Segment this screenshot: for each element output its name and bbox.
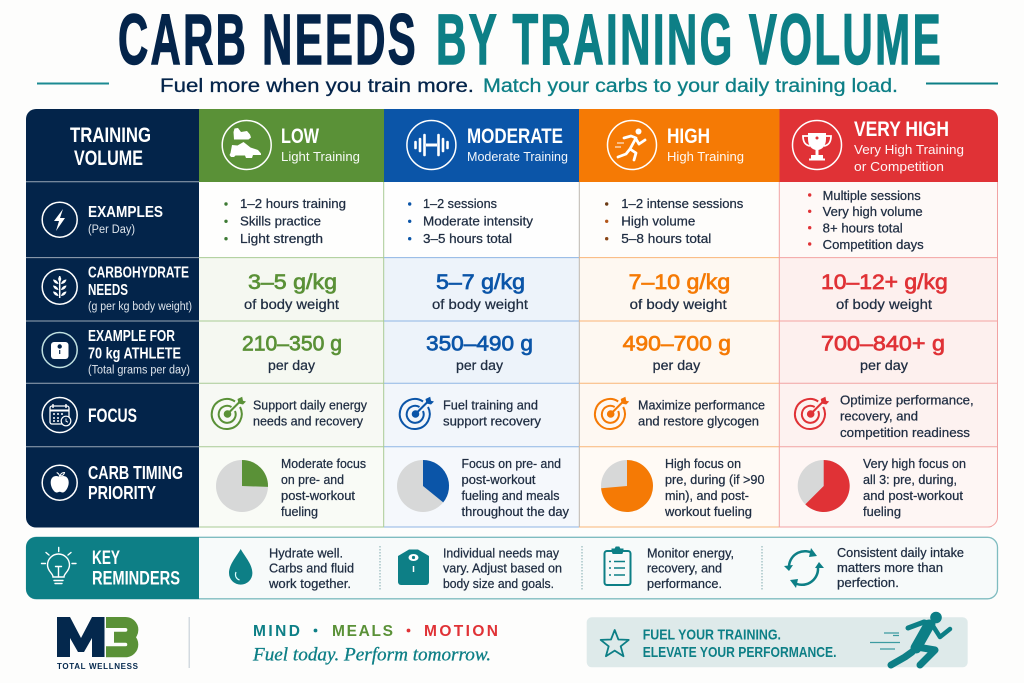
timing: moderate: Focus on pre- and [462,457,561,471]
pie chart [397,460,449,512]
focus: moderate: Fuel training and [443,399,538,413]
examples: low [224,197,346,246]
row label: carbohydrate needs: CARBOHYDRATE [88,265,189,282]
example amount: low: 210–350 g [242,333,342,356]
reminder: individual needs: Individual needs may [443,546,560,560]
row label: carb timing priority [42,463,183,503]
reminder: hydrate: Carbs and fluid [269,562,354,576]
carb needs: very high [821,271,948,312]
focus: low: needs and recovery [253,415,364,429]
timing: moderate: post-workout [462,473,536,487]
timing: low: Moderate focus [281,457,366,471]
heading: training volume: VOLUME [74,147,143,170]
icon: calendar [42,398,77,432]
timing: low: fueling [281,505,318,519]
callout: fuel your training: ELEVATE YOUR PERFORMANCE. [643,644,836,661]
carb needs: moderate [432,271,528,312]
focus: moderate [400,397,542,429]
examples: moderate: 3–5 hours total [423,232,512,246]
title: CARB NEEDS [118,1,418,80]
panel: key reminders [26,537,998,599]
icon: lightning [42,202,77,237]
timing: high: min), and post- [665,489,749,503]
reminder: individual needs: vary. Adjust based on [443,562,562,576]
examples: very high: Competition days [823,238,924,252]
reminder: individual needs: body size and goals. [443,577,554,591]
icon: shoes [222,120,271,170]
example amount: very high [821,333,945,373]
row label: examples: EXAMPLES [88,204,163,221]
carb needs: high [629,271,730,312]
icon: target [795,397,829,429]
header: very high: VERY HIGH [854,118,949,141]
carb needs: high: 7–10 g/kg [629,271,730,294]
examples: low: 1–2 hours training [240,197,346,211]
row label: focus: FOCUS [88,406,137,427]
timing: moderate: fueling and meals [462,489,560,503]
header: moderate: Moderate Training [467,149,568,164]
row label: carbohydrate needs [42,265,192,313]
example amount: high: per day [653,358,700,373]
header: high: High Training [667,149,744,164]
row label: focus [42,398,137,432]
timing: low: on pre- and [281,473,344,487]
timing: low [216,457,366,519]
timing: low: post-workout [281,489,356,503]
heading: training volume [70,124,151,170]
pie chart [216,460,268,512]
reminder: consistency: perfection. [837,576,899,590]
examples: moderate: 1–2 sessions [423,197,497,211]
example amount: moderate: per day [456,358,503,373]
header: low: LOW [281,125,319,148]
focus: low: Support daily energy [253,399,368,413]
timing: very high [798,457,966,519]
focus: high: Maximize performance [638,399,765,413]
examples: very high: Multiple sessions [823,189,921,203]
timing: very high: and post-workout [863,489,964,503]
row label: example for 70 kg athlete: (Total grams per day) [88,365,190,377]
row label: carbohydrate needs: (g per kg body weight) [88,301,192,313]
focus: very high: Optimize performance, [840,394,974,408]
header: very high: Very High Training [854,142,964,157]
logo: M3 total wellness [57,617,139,671]
timing: very high: Very high focus on [863,457,966,471]
focus: high: and restore glycogen [638,415,759,429]
row label: example for 70 kg athlete [42,328,190,377]
header: moderate [407,120,568,170]
reminder: hydrate [229,546,354,591]
timing: high: High focus on [665,457,741,471]
callout: fuel your training: FUEL YOUR TRAINING. [643,627,781,644]
header: high [608,120,744,170]
header: high: HIGH [667,125,710,148]
row label: example for 70 kg athlete: EXAMPLE FOR [88,328,175,345]
example amount: very high: 700–840+ g [821,333,945,356]
reminder: hydrate: work together. [268,577,351,591]
carb needs: high: of body weight [630,297,727,312]
reminder: monitor: recovery, and [647,562,722,576]
example amount: low: per day [268,358,315,373]
examples: moderate [408,197,534,246]
carb needs: very high: 10–12+ g/kg [821,271,948,294]
carb needs: moderate: 5–7 g/kg [436,271,525,294]
brand tagline: MOTION [424,623,498,640]
examples: low: Skills practice [240,214,321,228]
brand tagline: Fuel today. Perform tomorrow. [252,645,491,666]
reminder: consistency: matters more than [837,561,943,575]
header: low: Light Training [281,149,360,164]
examples: very high: Very high volume [823,205,923,219]
header: moderate: MODERATE [467,125,563,148]
timing: high [601,457,765,519]
reminder: individual needs [398,546,562,591]
pie chart [798,460,850,512]
heading: key reminders: REMINDERS [92,568,180,589]
table [26,109,998,528]
heading: training volume: TRAINING [70,124,151,147]
carb needs: very high: of body weight [836,297,932,312]
timing: very high: fueling [863,505,901,519]
carb needs: low [244,271,339,312]
brand tagline: MEALS [332,623,393,640]
icon: target [212,397,246,429]
icon: target [400,397,434,429]
reminder: consistency [784,546,964,590]
examples: very high [808,189,924,252]
subtitle: Match your carbs to your daily training load. [483,75,898,97]
reminder: consistency: Consistent daily intake [837,546,964,560]
title [118,1,943,80]
focus: low [212,397,368,429]
example amount: high: 490–700 g [623,333,731,356]
row label: examples [42,202,163,237]
brand tagline: MIND [253,623,300,640]
icon: runner [608,120,656,170]
focus: very high: recovery, and [840,410,918,424]
row label: carb timing priority: CARB TIMING [88,463,183,483]
timing: high: pre, during (if >90 [665,473,765,487]
icon: star [601,630,629,656]
focus: very high: competition readiness [840,426,970,440]
icon: wheat [42,269,77,304]
header: low [222,120,360,170]
header: very high [792,118,964,174]
examples: high: 1–2 intense sessions [621,197,743,211]
examples: high: 5–8 hours total [621,232,711,246]
icon: dumbbell [407,120,456,170]
examples: very high: 8+ hours total [823,222,903,236]
row label: carbohydrate needs: NEEDS [88,282,128,299]
example amount: moderate [426,333,533,373]
examples: low: Light strength [240,232,323,246]
heading: key reminders [92,548,180,589]
header: very high: or Competition [854,159,944,174]
timing: very high: all 3: pre, during, [863,473,957,487]
carb needs: moderate: of body weight [432,297,528,312]
icon: light bulb [42,548,76,584]
carb needs: low: of body weight [244,297,339,312]
brand tagline [252,623,498,666]
subtitle [37,75,998,97]
example amount: very high: per day [860,358,908,373]
reminder: hydrate: Hydrate well. [269,546,343,560]
heading: key reminders: KEY [92,548,120,569]
timing: moderate [397,457,570,519]
focus: moderate: support recovery [443,415,542,429]
example amount: low [242,333,342,373]
reminder: monitor: Monitor energy, [647,546,734,560]
examples: high: High volume [621,214,695,228]
carb needs: low: 3–5 g/kg [248,271,337,294]
icon: scale [42,332,77,368]
focus: high [595,397,765,429]
callout: fuel your training [587,612,968,667]
pie chart [601,460,653,512]
row label: carb timing priority: PRIORITY [88,483,156,503]
timing: high: workout fueling [664,505,752,519]
example amount: high [623,333,731,373]
examples: moderate: Moderate intensity [423,214,534,228]
table backgrounds [26,109,998,528]
timing: moderate: throughout the day [462,505,570,519]
logo: M3 total wellness: TOTAL WELLNESS [57,662,139,671]
icon: target [595,397,629,429]
subtitle: Fuel more when you train more. [160,75,474,97]
focus: very high [795,394,974,440]
icon: running figure [870,612,950,665]
row label: examples: (Per Day) [88,224,135,236]
reminder: monitor [604,546,734,591]
examples: high [605,197,743,246]
icon: apple [42,465,77,500]
icon: trophy [792,120,842,170]
example amount: moderate: 350–490 g [426,333,533,356]
reminder: monitor: performance. [647,577,722,591]
row label: example for 70 kg athlete: 70 kg ATHLETE [88,346,181,363]
